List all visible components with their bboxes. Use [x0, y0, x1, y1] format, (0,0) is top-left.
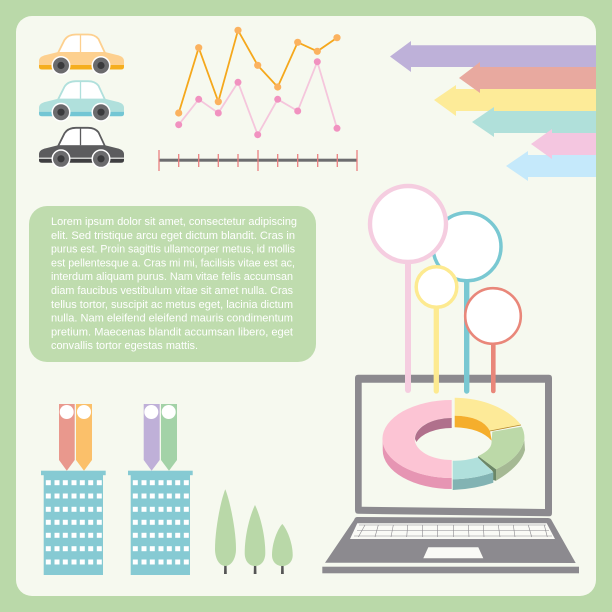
banners: left pair	[59, 404, 92, 471]
trackpad	[423, 547, 483, 558]
arrow: salmon	[459, 62, 596, 93]
donut slice: yellow	[455, 398, 521, 441]
donut slice: teal	[453, 457, 493, 490]
donut slice: green	[478, 427, 525, 481]
balloon: pink	[370, 186, 446, 390]
balloon: teal	[433, 213, 501, 391]
donut chart	[382, 398, 525, 490]
text panel: elit. Sed tristique arcu eget dictum blandit. Cras in	[51, 230, 295, 242]
balloon: yellow	[416, 267, 457, 391]
arrow: teal	[472, 107, 596, 137]
text panel: convallis tortor egestas mattis.	[51, 340, 198, 352]
text panel: pretium. Maecenas blandit accumsan libero, eget	[51, 326, 293, 338]
icon: medium tree	[245, 505, 265, 574]
text panel: nulla. Nam eleifend eleifend mauris condimentum	[51, 313, 293, 325]
icon: building right	[128, 471, 193, 575]
line chart	[175, 27, 341, 138]
arrow: purple	[390, 41, 596, 72]
text panel: est pellentesque a. Cras mi mi, facilisis vitae est ac,	[51, 257, 295, 269]
text panel: tellus tortor, suscipit ac metus eget, lacinia dictum	[51, 299, 293, 311]
icon: small tree	[272, 524, 293, 574]
banners: right pair	[144, 404, 177, 471]
icon: laptop	[322, 375, 579, 573]
arrow: pink	[531, 129, 596, 159]
arrow: light blue	[506, 151, 596, 181]
icon: teal car	[39, 81, 124, 122]
text panel: interdum aliquam purus. Nam vitae felis accumsan	[51, 271, 293, 283]
chart axis with ticks	[159, 150, 357, 171]
icon: peach car	[39, 34, 124, 75]
text panel: Lorem ipsum dolor sit amet, consectetur adipiscing	[51, 216, 297, 228]
donut slice: pink	[382, 400, 452, 489]
icon: dark car	[39, 128, 124, 168]
arrow: yellow	[434, 85, 596, 116]
text panel: diam faucibus vestibulum vitae sit amet nulla. Cras	[51, 285, 293, 297]
icon: building left	[41, 471, 106, 575]
text panel	[29, 206, 316, 362]
laptop screen frame	[355, 375, 552, 516]
text panel: purus est. Proin sagittis ullamcorper metus, id mollis	[51, 244, 295, 256]
arrows group	[390, 41, 596, 181]
icon: tall tree	[215, 489, 236, 574]
balloon: salmon	[465, 288, 521, 391]
laptop base	[325, 517, 576, 563]
keyboard	[350, 523, 555, 539]
laptop front edge	[322, 567, 579, 573]
